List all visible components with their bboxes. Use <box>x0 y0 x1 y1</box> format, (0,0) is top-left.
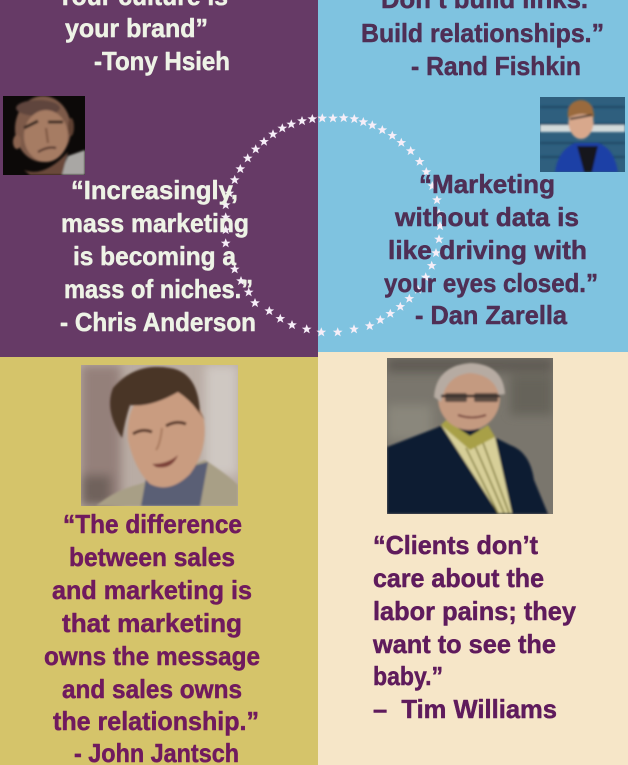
quote: Tony Hsieh: your brand” <box>65 13 208 43</box>
quote: Tim Williams: labor pains; they <box>373 596 577 626</box>
panel: John Jantsch (yellow) <box>0 357 318 765</box>
quote: John Jantsch <box>44 509 260 765</box>
quote: Chris Anderson: mass of niches.” <box>64 274 253 304</box>
quote: John Jantsch: the relationship.” <box>53 706 259 736</box>
star circle <box>221 113 445 336</box>
quote: John Jantsch: and marketing is <box>52 575 252 605</box>
quote: Tim Williams: want to see the <box>372 629 556 659</box>
quote: Rand Fishkin: - Rand Fishkin <box>411 51 581 81</box>
panel: Tony Hsieh and Chris Anderson (purple) <box>0 0 318 357</box>
quote: Dan Zarella: your eyes closed.” <box>384 268 598 298</box>
quote: Dan Zarella <box>384 169 598 330</box>
quote: Chris Anderson <box>60 175 256 337</box>
panel: Rand Fishkin and Dan Zarella (blue) <box>318 0 628 352</box>
panel: Tim Williams (cream) <box>318 352 628 765</box>
quote: Tim Williams: care about the <box>373 563 544 593</box>
quote: Chris Anderson: is becoming a <box>73 241 236 271</box>
quote: John Jantsch: “The difference <box>63 509 242 539</box>
quote: Dan Zarella: “Marketing <box>419 169 555 199</box>
quote: Tony Hsieh: -Tony Hsieh <box>94 46 230 76</box>
quote: John Jantsch: owns the message <box>44 641 260 671</box>
quote: Tim Williams: “Clients don’t <box>373 530 538 560</box>
quote: John Jantsch: that marketing <box>62 608 242 638</box>
quote: Chris Anderson: - Chris Anderson <box>60 307 256 337</box>
quote: Chris Anderson: mass marketing <box>61 208 249 238</box>
quote: Tim Williams: baby.” <box>373 661 443 691</box>
quote: John Jantsch: and sales owns <box>62 674 242 704</box>
quote: Dan Zarella: like driving with <box>388 235 587 265</box>
quote: Tim Williams: – Tim Williams <box>373 694 557 724</box>
quote: Tim Williams <box>372 530 577 724</box>
quote: Dan Zarella: - Dan Zarella <box>415 300 568 330</box>
quote: Tony Hsieh <box>57 0 230 76</box>
quote: Rand Fishkin <box>361 0 604 81</box>
photo: Tony Hsieh <box>3 96 85 175</box>
photo: Rand Fishkin <box>540 97 625 172</box>
photo: John Jantsch <box>81 365 238 506</box>
quote: Dan Zarella: without data is <box>394 202 579 232</box>
quote: Rand Fishkin: Build relationships.” <box>361 18 604 48</box>
photo: Tim Williams <box>387 358 553 514</box>
quote: John Jantsch: between sales <box>69 542 235 572</box>
quote: Chris Anderson: “Increasingly, <box>71 175 238 205</box>
